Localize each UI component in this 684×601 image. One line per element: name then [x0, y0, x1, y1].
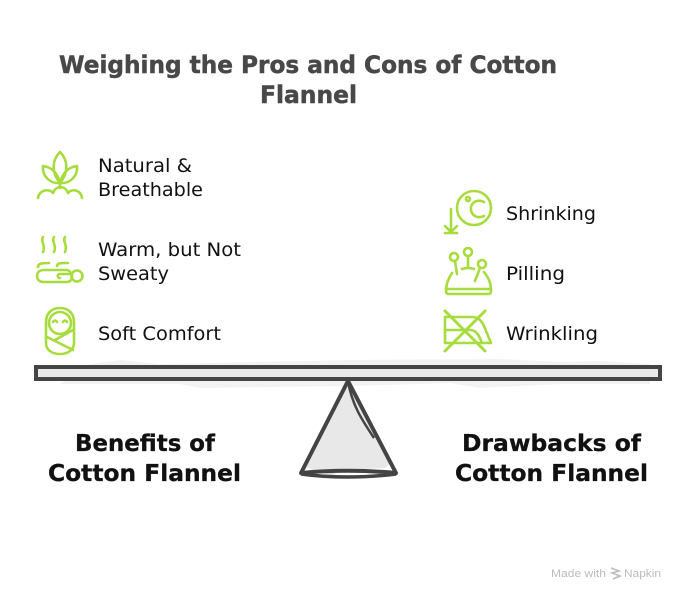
watermark: Napkin — [624, 568, 661, 580]
icon: swaddled baby — [46, 308, 74, 354]
text: natural and breathable: Breathable — [98, 179, 203, 201]
icon: shrinking — [445, 191, 491, 233]
heading: drawbacks: Drawbacks of — [462, 431, 642, 457]
text: natural and breathable: Natural & — [98, 155, 192, 177]
text: warm but not sweaty: Sweaty — [98, 263, 169, 285]
text: shrinking: Shrinking — [506, 203, 596, 225]
seesaw fulcrum — [301, 381, 396, 477]
watermark — [551, 568, 661, 580]
icon: no ironing — [445, 311, 491, 351]
text: warm but not sweaty: Warm, but Not — [98, 239, 241, 261]
watermark: Made with — [551, 568, 606, 580]
text: natural and breathable — [98, 155, 203, 201]
text: pilling: Pilling — [506, 263, 565, 285]
seesaw beam — [36, 359, 660, 388]
text: warm but not sweaty — [98, 239, 241, 285]
title: Weighing the Pros and Cons of Cotton — [59, 51, 557, 79]
heading: benefits: Cotton Flannel — [48, 461, 241, 487]
heading: drawbacks: Cotton Flannel — [455, 461, 648, 487]
heading: benefits: Benefits of — [75, 431, 216, 457]
text: soft comfort: Soft Comfort — [98, 323, 221, 345]
text: wrinkling: Wrinkling — [506, 323, 598, 345]
heading: drawbacks — [455, 431, 648, 487]
title — [59, 51, 557, 109]
icon: pin cushion — [446, 248, 491, 294]
icon: warm sleeping person — [37, 237, 82, 282]
title: Flannel — [260, 81, 357, 109]
heading: benefits — [48, 431, 241, 487]
icon: plant — [38, 152, 82, 198]
